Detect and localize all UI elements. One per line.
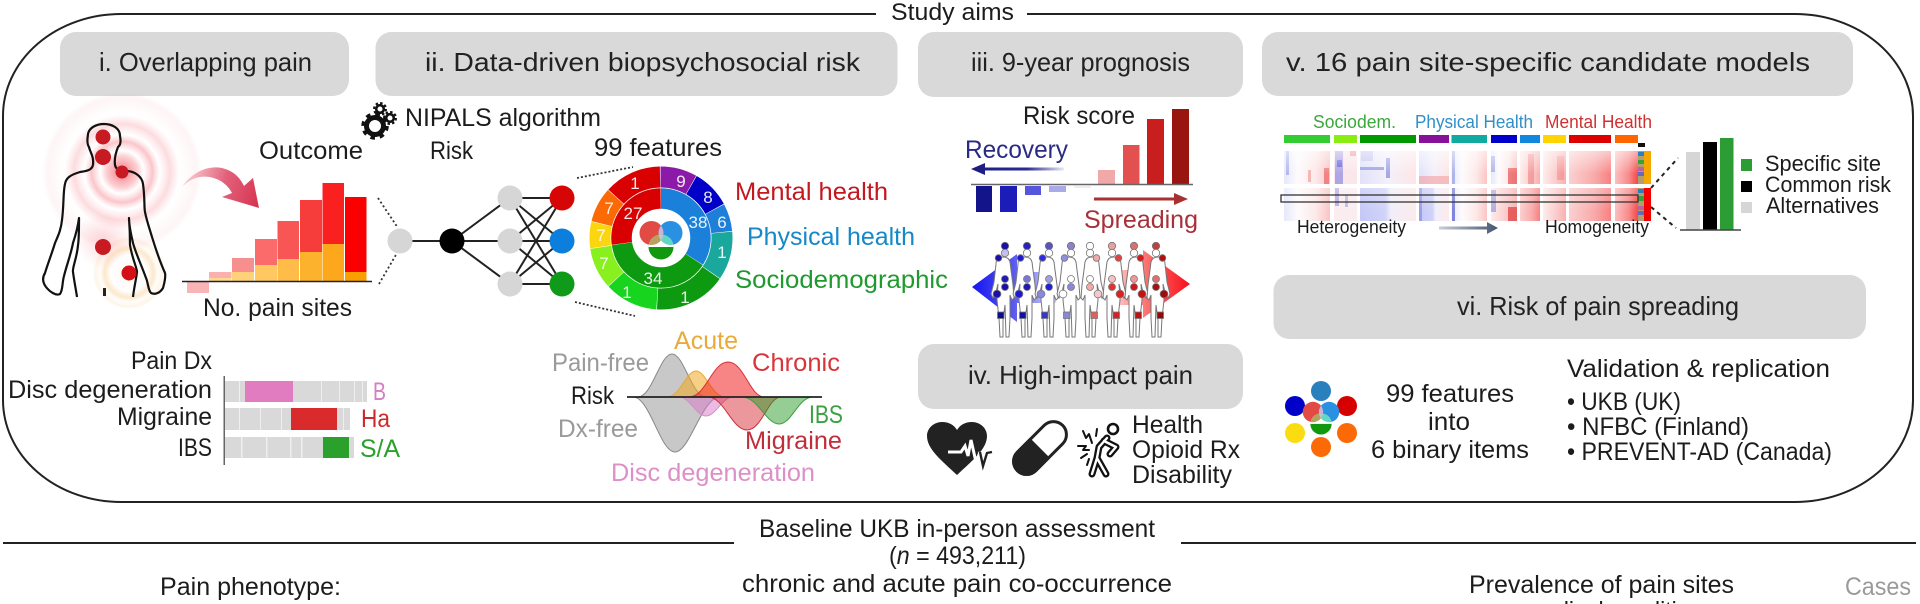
labels: risk waves: Risk [571, 382, 614, 410]
labels: high-impact criteria: Health [1132, 411, 1203, 439]
legend: models: Specific site [1765, 151, 1881, 176]
heatmap [1281, 135, 1651, 221]
text: features into items: 6 binary items [1371, 436, 1529, 464]
heatmap rows: lower [1284, 188, 1638, 221]
labels: risk waves: Chronic [752, 349, 840, 377]
heading: high-impact pain: iv. High-impact pain [968, 360, 1193, 390]
figure 5 [1081, 242, 1104, 337]
heatmap category labels: Mental Health [1545, 112, 1652, 132]
sunburst counts: 1 [717, 243, 727, 262]
heading: risk of pain spreading: vi. Risk of pain spreading [1457, 291, 1739, 321]
labels: risk waves: Migraine [745, 427, 842, 455]
icon: heart [927, 422, 992, 475]
icon: pill [1006, 415, 1073, 482]
body figures gradient [972, 242, 1190, 337]
sunburst counts: 38 [689, 213, 707, 232]
label: risk score: Risk score [1023, 102, 1135, 130]
sunburst counts: 7 [596, 226, 606, 245]
sunburst counts: 8 [703, 188, 713, 207]
labels: risk waves: IBS [809, 401, 843, 429]
heading: prevalence of pain sites: Prevalence of pain sites [1469, 571, 1734, 599]
sunburst: 99 features [575, 167, 727, 316]
labels: risk waves: Disc degeneration [611, 459, 815, 487]
text: validation and replication [1567, 355, 1832, 466]
label: cases: Cases [1845, 573, 1911, 601]
label: recovery: Recovery [965, 136, 1068, 164]
arrow: heterogeneity to homogeneity [1439, 222, 1498, 234]
text: validation and replication: • NFBC (Finland) [1567, 413, 1749, 441]
label: outcome: Outcome [259, 137, 363, 165]
risk score bars [971, 109, 1193, 212]
sunburst counts: 1 [622, 283, 632, 302]
heading: overlapping pain: i. Overlapping pain [99, 47, 312, 77]
heading: prognosis [918, 32, 1243, 97]
panel vi: risk of pain spreading [1274, 275, 1866, 466]
sunburst counts: 27 [624, 204, 642, 223]
labels: pain dx: Pain Dx [131, 347, 212, 375]
figure 7 [1125, 242, 1148, 337]
neural network [378, 186, 574, 296]
heading: prognosis: iii. 9-year prognosis [971, 47, 1190, 77]
sunburst counts: 1 [630, 174, 640, 193]
risk waves [552, 327, 843, 487]
figure 6 [1103, 242, 1126, 337]
labels: risk waves [552, 327, 843, 487]
label: homogeneity: Homogeneity [1545, 217, 1649, 237]
heading: data-driven risk [376, 32, 898, 96]
heading: risk of pain spreading [1274, 275, 1866, 339]
arrow: pain to outcome [182, 167, 259, 208]
labels: pain dx: IBS [178, 434, 212, 462]
heading: data-driven risk: ii. Data-driven biopsychosocial risk [425, 47, 861, 77]
sunburst counts: 34 [644, 269, 662, 288]
icon: person in pain [1078, 424, 1118, 474]
text: features into items: into [1428, 408, 1470, 436]
sunburst counts: 6 [717, 213, 727, 232]
panel i: overlapping pain [8, 32, 400, 465]
panel iv: high-impact pain [918, 344, 1243, 489]
heatmap rows: upper [1284, 151, 1638, 184]
text: validation and replication: • PREVENT-AD (Canada) [1567, 438, 1832, 466]
labels: pain dx [8, 347, 212, 462]
label: nipals algorithm: NIPALS algorithm [405, 104, 601, 132]
pain diagnosis bars: S/A [360, 435, 400, 463]
baseline divider lines [3, 542, 1916, 544]
panel ii: data-driven biopsychosocial risk [363, 32, 948, 487]
heatmap category labels: Sociodem. [1313, 112, 1396, 132]
labels: risk waves: Dx-free [558, 415, 638, 443]
figure 8 [1147, 242, 1170, 337]
heading: overlapping pain [60, 32, 349, 96]
bar chart: number of pain sites [182, 183, 372, 293]
sunburst counts: 7 [604, 199, 614, 218]
sunburst counts: 9 [676, 172, 686, 191]
text: baseline assessment [742, 515, 1172, 598]
text: features into items: 99 features [1386, 380, 1514, 408]
sunburst counts [596, 172, 727, 307]
text: features into items [1371, 380, 1529, 464]
pain diagnosis bars: Ha [361, 405, 390, 433]
figure 1 [991, 242, 1014, 337]
labels: risk waves: Acute [674, 327, 738, 355]
label: spreading: Spreading [1084, 206, 1198, 234]
sunburst counts: 7 [599, 254, 609, 273]
figure 4 [1057, 242, 1080, 337]
model comparison bars [1651, 138, 1741, 230]
site colour column [1638, 151, 1651, 221]
pain diagnosis bars: B [373, 378, 386, 406]
text: validation and replication: Validation & replication [1567, 355, 1830, 383]
legend: models [1741, 151, 1892, 218]
labels: high-impact criteria: Opioid Rx [1132, 436, 1240, 464]
label: 99 features: 99 features [594, 134, 722, 162]
heatmap category labels [1313, 112, 1652, 132]
icon: body with pain sites [42, 92, 202, 309]
text: baseline assessment: (n = 493,211) [889, 542, 1026, 570]
sunburst counts: 1 [680, 288, 690, 307]
labels: risk waves: Pain-free [552, 349, 649, 377]
label: physical health: Physical health [747, 223, 915, 251]
heading: pain phenotype: Pain phenotype: [160, 573, 341, 601]
panel iii: 9-year prognosis [918, 32, 1243, 337]
label: heterogeneity: Heterogeneity [1297, 217, 1406, 237]
labels: high-impact criteria [1132, 411, 1240, 489]
heading: high-impact pain [918, 344, 1243, 409]
icon: gears [363, 103, 396, 138]
labels: pain dx: Migraine [117, 403, 212, 431]
labels: high-impact criteria: Disability [1132, 461, 1232, 489]
figure 3 [1035, 242, 1058, 337]
icon: six binary items [1285, 381, 1357, 457]
figure 2 [1013, 242, 1036, 337]
venn icon [640, 221, 682, 260]
label: sociodemographic: Sociodemographic [735, 266, 948, 294]
label: risk: Risk [430, 137, 473, 165]
arrow: recovery [971, 163, 1064, 175]
labels: pain dx: Disc degeneration [8, 376, 212, 404]
text: baseline assessment: chronic and acute pain co-occurrence [742, 570, 1172, 598]
text: baseline assessment: Baseline UKB in-person assessment [759, 515, 1155, 543]
arrow: spreading [1094, 193, 1188, 205]
heatmap category labels: Physical Health [1415, 112, 1533, 132]
heading: candidate models [1262, 32, 1853, 96]
label: mental health: Mental health [735, 178, 888, 206]
legend: models: Alternatives [1766, 193, 1879, 218]
heading: candidate models: v. 16 pain site-specific candidate models [1286, 47, 1810, 77]
panel v: 16 pain site-specific candidate models [1262, 32, 1892, 237]
legend: models: Common risk [1765, 172, 1892, 197]
text: validation and replication: • UKB (UK) [1567, 388, 1681, 416]
label: no. pain sites: No. pain sites [203, 294, 352, 322]
pain diagnosis bars [8, 347, 400, 465]
